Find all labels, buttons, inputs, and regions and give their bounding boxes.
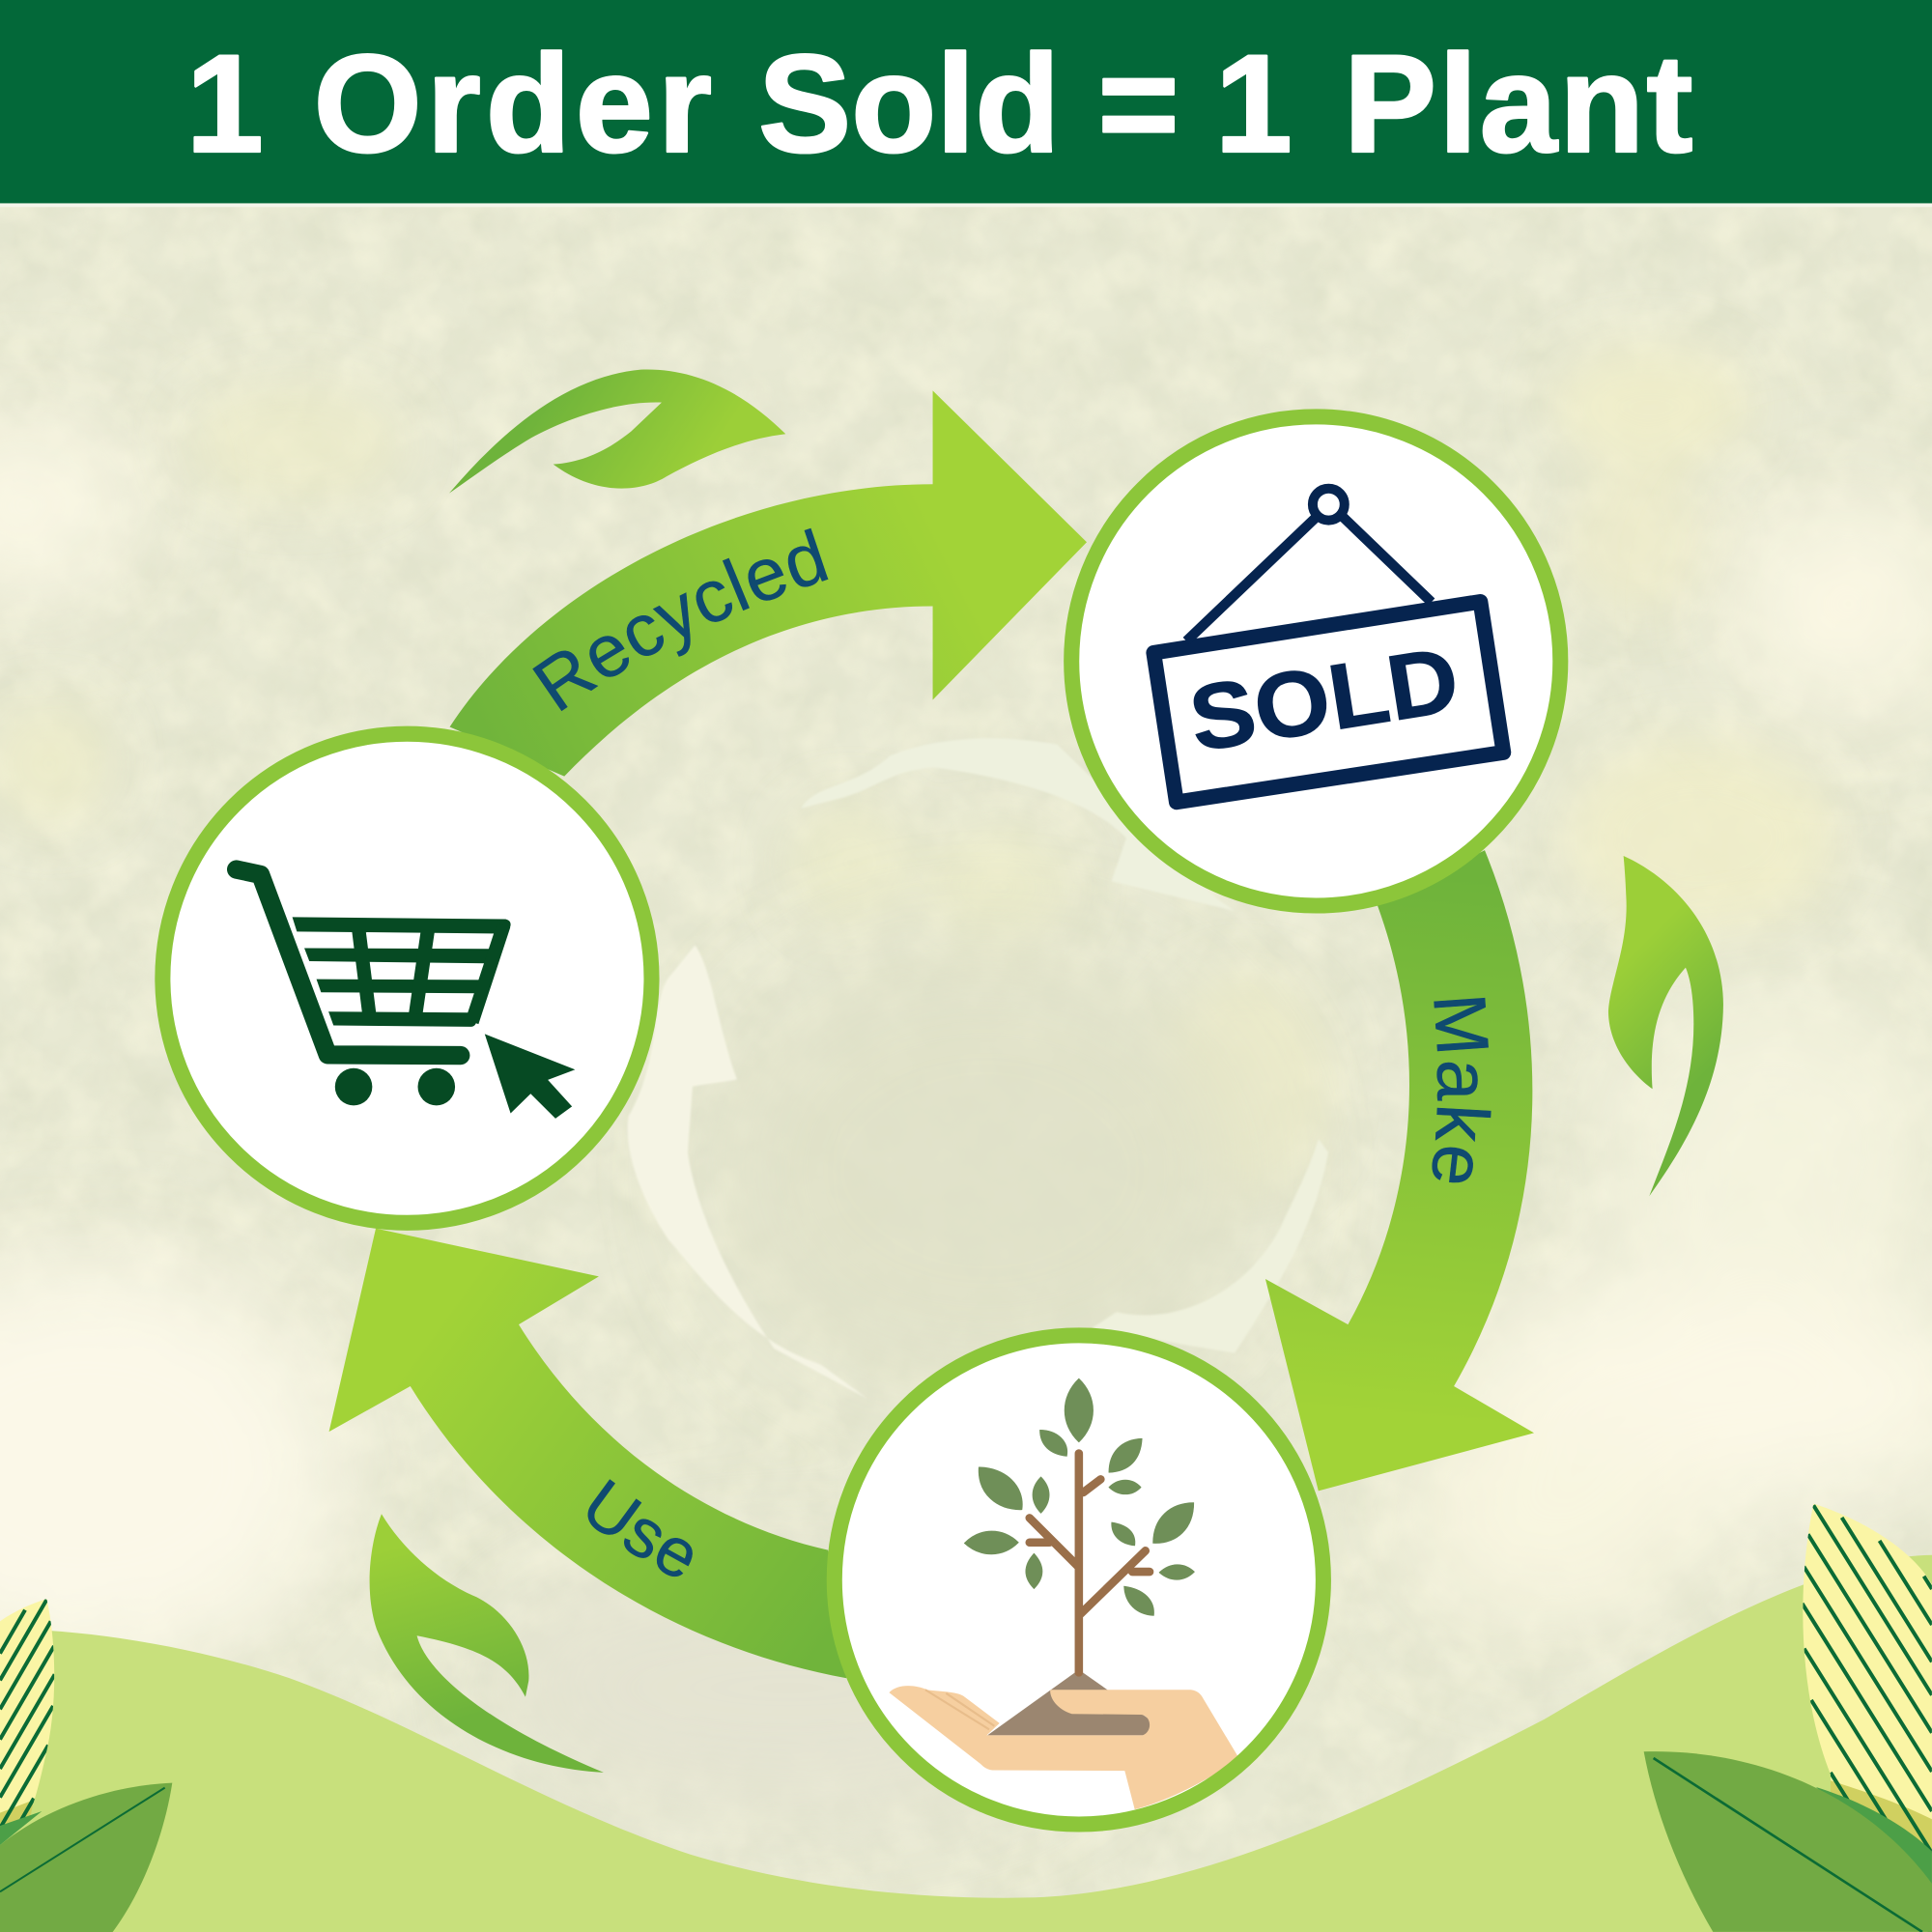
icon: cart with cursor — [237, 869, 575, 1119]
title: Order — [314, 26, 717, 182]
circle: sold sign — [1071, 416, 1560, 906]
circle: plant in hand — [835, 1335, 1323, 1825]
circle: shopping cart — [162, 734, 651, 1223]
icon: sold sign — [1153, 489, 1503, 802]
green hill — [0, 1555, 1932, 1932]
title: Sold — [758, 26, 1060, 182]
floating leaf bottom left — [370, 1514, 604, 1773]
title banner — [0, 0, 1932, 207]
arrow label: use: Use — [587, 1479, 693, 1577]
corner leaves right — [1644, 1504, 1932, 1932]
faint recycling symbol in the forest — [628, 738, 1328, 1399]
arrow: recycled — [450, 390, 1087, 777]
icon: sold sign: SOLD — [1183, 628, 1465, 772]
icon: sapling in hand — [889, 1378, 1239, 1809]
floating leaf top left — [449, 369, 785, 494]
floating leaf right — [1608, 856, 1723, 1196]
title: Plant — [1344, 26, 1695, 182]
title: = — [1097, 26, 1179, 182]
title: 1 — [1215, 26, 1293, 182]
arrow label: recycled: Recycled — [532, 527, 829, 711]
arrow label: make: Make — [1432, 997, 1492, 1182]
arrow: use — [329, 1229, 846, 1678]
arrow: make — [1265, 850, 1534, 1491]
title: 1 — [186, 26, 264, 182]
corner leaves left — [0, 1599, 172, 1932]
